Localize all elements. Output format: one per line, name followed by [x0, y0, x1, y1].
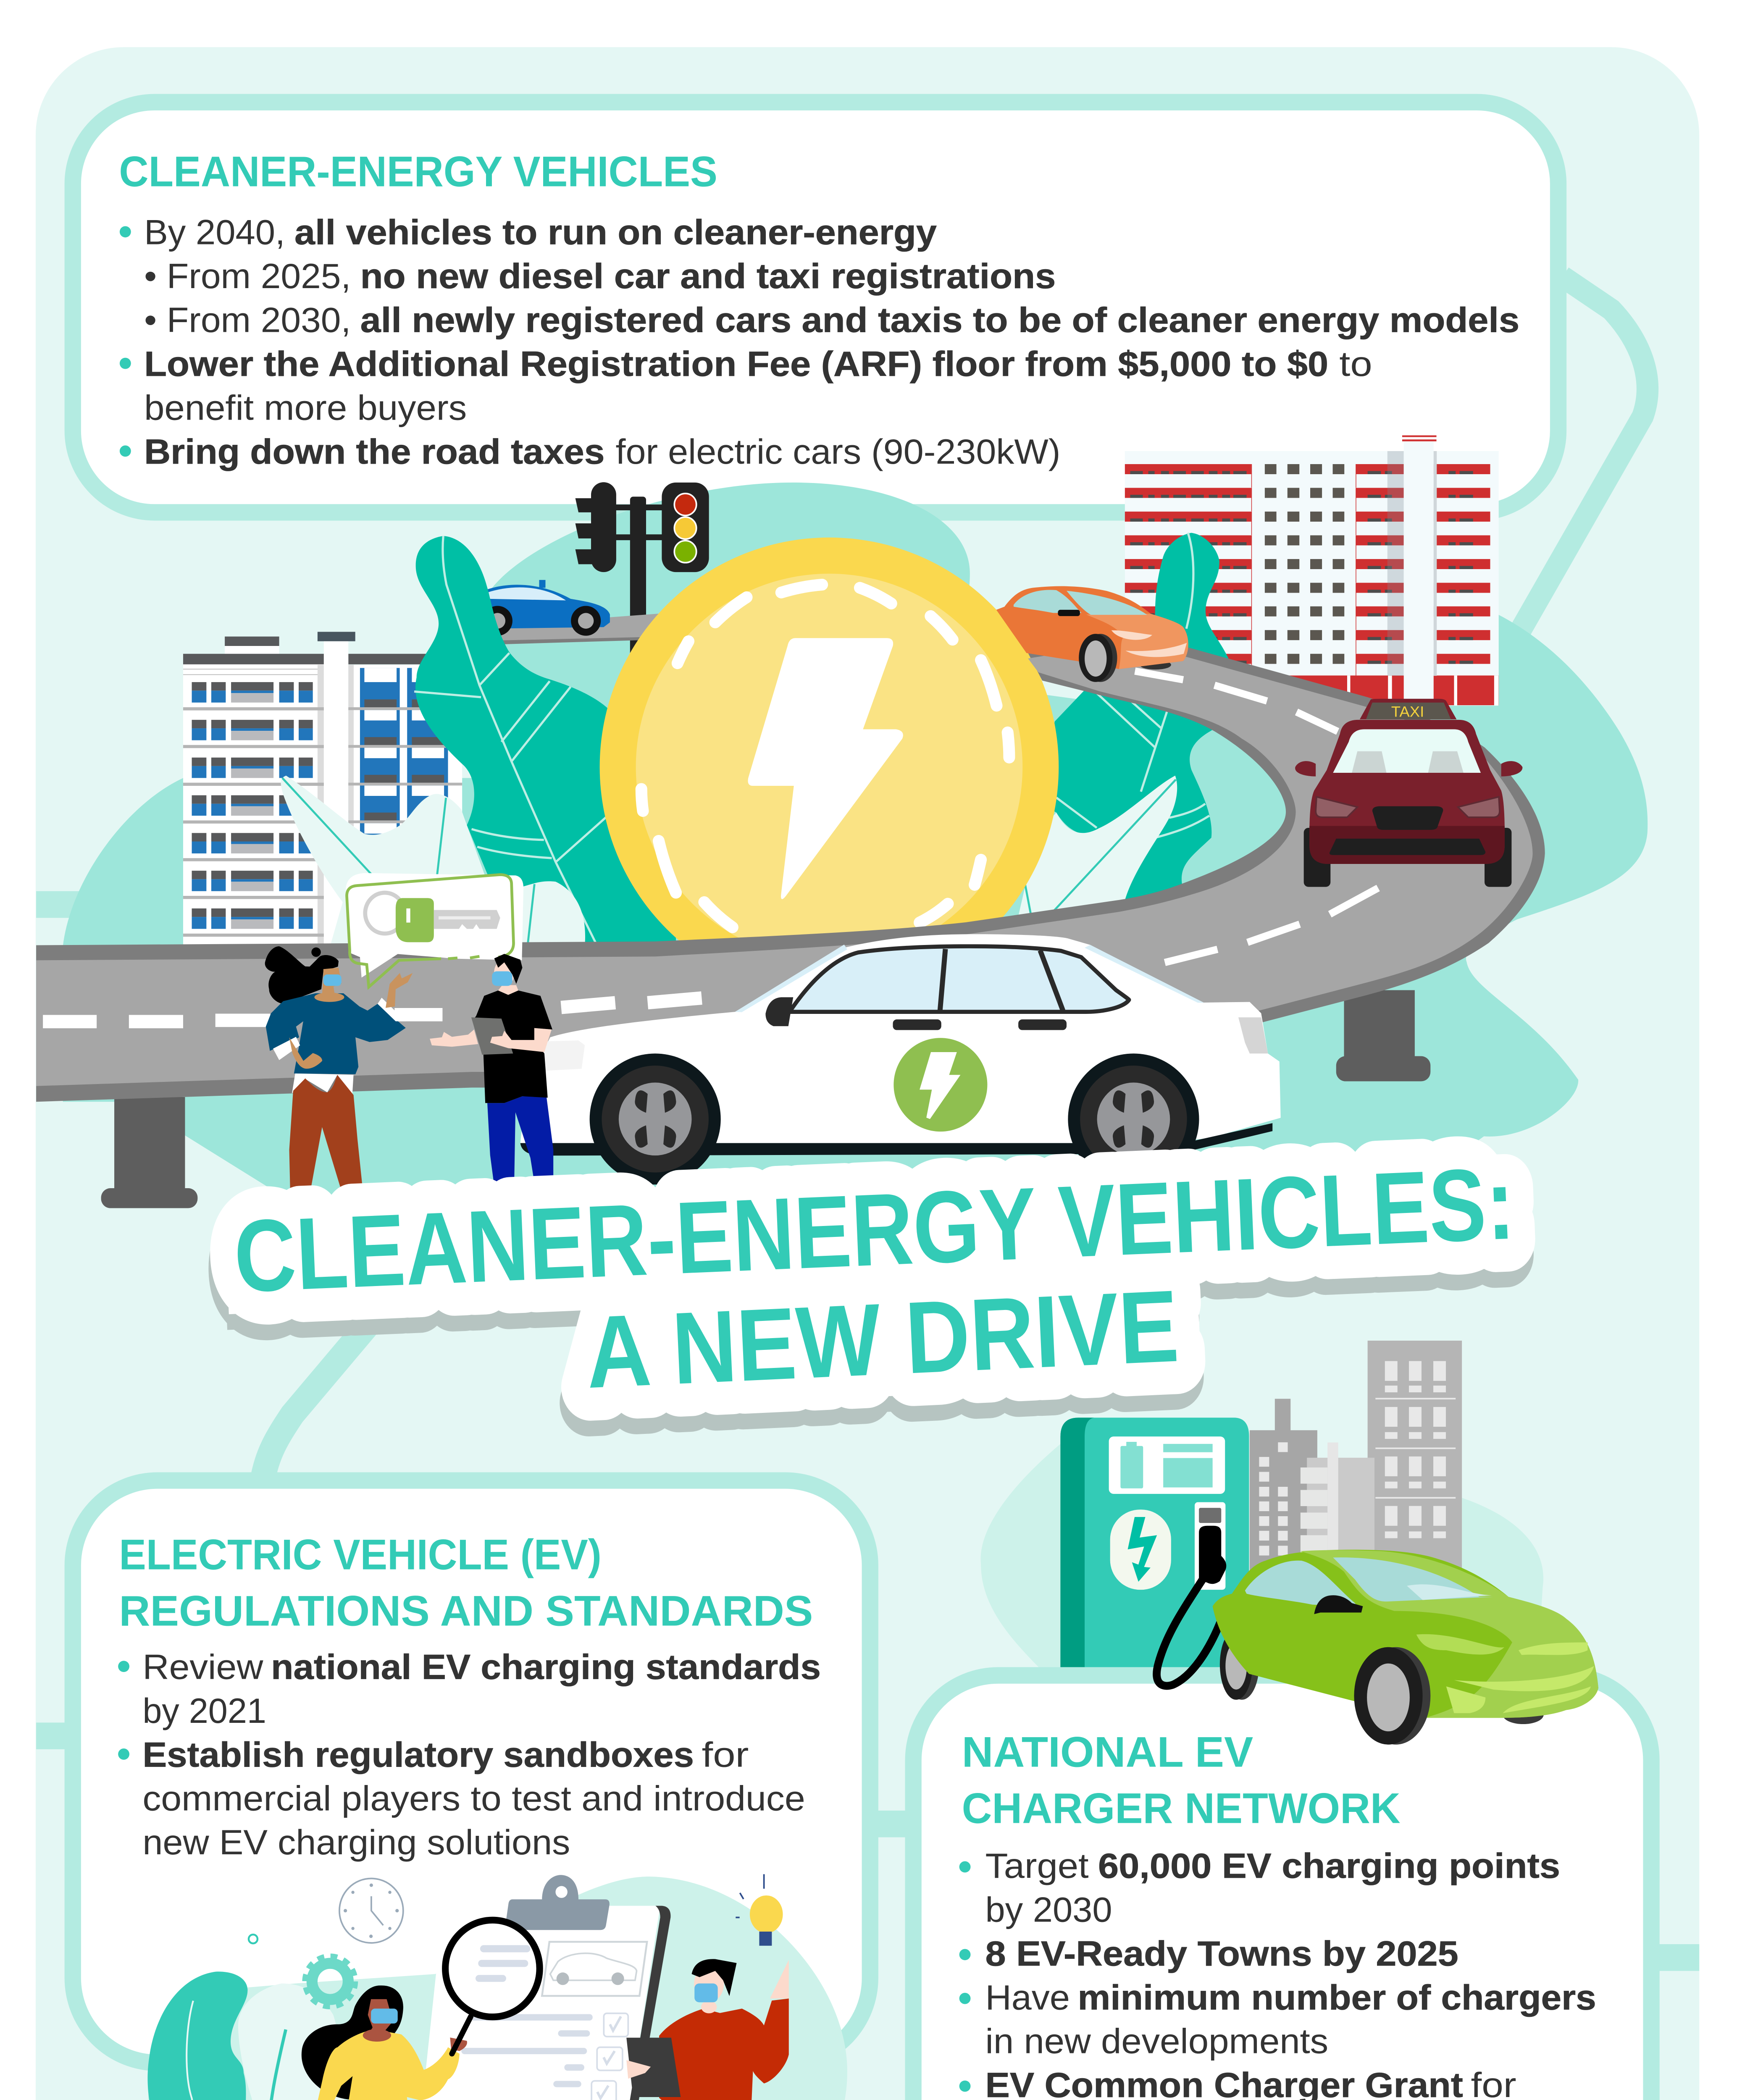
green electric car — [1213, 1550, 1598, 1745]
bullet list: charger network: in new developments — [985, 2021, 1328, 2061]
white electric car — [520, 934, 1281, 1184]
bullet list: EV regulations: commercial players to test and introduce — [142, 1779, 805, 1818]
pale back leaf — [238, 1984, 344, 2100]
traffic light — [575, 482, 709, 669]
main title: A NEW DRIVE — [582, 1284, 1179, 1425]
bullet list: cleaner-energy vehicles: all newly registered cars and taxis to be of cleaner energy models — [360, 300, 1519, 340]
clipboard checklist — [412, 1875, 670, 2100]
panel: cleaner-energy vehicles — [73, 102, 1558, 512]
pale blob — [147, 1877, 847, 2100]
bullet list: cleaner-energy vehicles: Lower the Additional Registration Fee (ARF) floor from $5,000 to $0 — [144, 344, 1328, 383]
main title: CLEANER-ENERGY VEHICLES: — [232, 1146, 1517, 1314]
bullet list: cleaner-energy vehicles: for electric cars (90-230kW) — [615, 432, 1061, 471]
bullet list: charger network: 8 EV-Ready Towns by 2025 — [985, 1934, 1458, 1973]
clock — [339, 1879, 403, 1943]
bullet list: cleaner-energy vehicles: • From 2030, — [144, 300, 351, 340]
small road and blue car — [483, 580, 668, 644]
main title: A NEW DRIVE — [584, 1268, 1181, 1410]
bullet list: EV regulations: for — [702, 1735, 749, 1774]
bullet list: cleaner-energy vehicles: • From 2025, — [144, 256, 351, 296]
taxi: TAXI — [1391, 703, 1424, 720]
speech bubble with key — [346, 873, 523, 987]
gear — [305, 1956, 355, 2007]
main title: CLEANER-ENERGY VEHICLES: — [230, 1162, 1515, 1329]
heading: charger network — [962, 1727, 1401, 1832]
hero scene — [36, 436, 1648, 1239]
bullet list: EV regulations: national EV charging standards — [271, 1647, 821, 1686]
stem — [268, 2029, 286, 2100]
regulation illustration — [147, 1874, 847, 2100]
bullet list: cleaner-energy vehicles: By 2040, — [144, 213, 285, 252]
bullet list: cleaner-energy vehicles: all vehicles to run on cleaner-energy — [294, 213, 937, 252]
person: man in black — [430, 954, 553, 1186]
main title: CLEANER-ENERGY VEHICLES: — [232, 1146, 1517, 1314]
tropical leaves — [414, 533, 1229, 959]
main title: A NEW DRIVE — [584, 1268, 1181, 1410]
bullet list: cleaner-energy vehicles: Bring down the road taxes — [144, 432, 604, 471]
HDB block left — [183, 632, 462, 946]
bullet list: charger network: Have — [985, 1977, 1070, 2017]
left big leaf — [147, 1971, 332, 2100]
bullet list: charger network: minimum number of chargers — [1078, 1977, 1596, 2017]
background blobs — [63, 483, 1648, 1239]
coin with lightning bolt — [600, 538, 1059, 996]
heading: charger network: CHARGER NETWORK — [962, 1784, 1401, 1832]
person: man in red — [626, 1959, 789, 2100]
charging station — [1060, 1418, 1249, 1669]
small ring — [249, 1935, 258, 1943]
main title — [223, 1146, 1517, 1425]
person: woman in yellow — [300, 1985, 467, 2100]
heading: EV regulations: REGULATIONS AND STANDARDS — [119, 1587, 813, 1635]
taxi — [1295, 699, 1522, 887]
bullet list: charger network: by 2030 — [985, 1890, 1112, 1929]
person: woman in blue — [265, 946, 413, 1197]
bullet list: EV regulations: new EV charging solutions — [142, 1822, 570, 1862]
heading: charger network: NATIONAL EV — [962, 1727, 1253, 1776]
orange car — [996, 586, 1188, 682]
panel: EV regulations and standards — [73, 1480, 870, 2063]
city buildings — [1250, 1341, 1462, 1576]
heading: EV regulations: ELECTRIC VEHICLE (EV) — [119, 1530, 602, 1578]
connector road lines — [36, 277, 1699, 1958]
bullet list: charger network: 60,000 EV charging points — [1098, 1846, 1560, 1885]
elevated road — [36, 641, 1545, 1102]
heading: EV regulations — [119, 1530, 813, 1635]
bullet list: EV regulations: Review — [142, 1647, 263, 1686]
bullet list: EV regulations: by 2021 — [142, 1691, 266, 1730]
panel: national EV charger network — [913, 1675, 1651, 2100]
bullet list: cleaner-energy vehicles: no new diesel car and taxi registrations — [360, 256, 1056, 296]
bullet list: cleaner-energy vehicles: to — [1339, 344, 1372, 383]
light bulb — [736, 1874, 783, 1946]
heading: cleaner-energy vehicles: CLEANER-ENERGY VEHICLES — [119, 147, 717, 196]
bullet list: EV regulations — [118, 1647, 821, 1862]
HDB block right — [1125, 436, 1499, 706]
bullet list: charger network — [959, 1846, 1612, 2100]
bullet list: charger network: Target — [985, 1846, 1089, 1885]
charging station illustration — [980, 1341, 1543, 1669]
bullet list: cleaner-energy vehicles: benefit more buyers — [144, 388, 467, 427]
charging cable — [1157, 1580, 1225, 1686]
magnifying glass — [445, 1920, 540, 2054]
pale leaves — [281, 776, 1177, 946]
elevated road pillars — [101, 990, 1430, 1208]
bullet list: cleaner-energy vehicles — [120, 213, 1519, 471]
bullet list: EV regulations: Establish regulatory sandboxes — [142, 1735, 694, 1774]
